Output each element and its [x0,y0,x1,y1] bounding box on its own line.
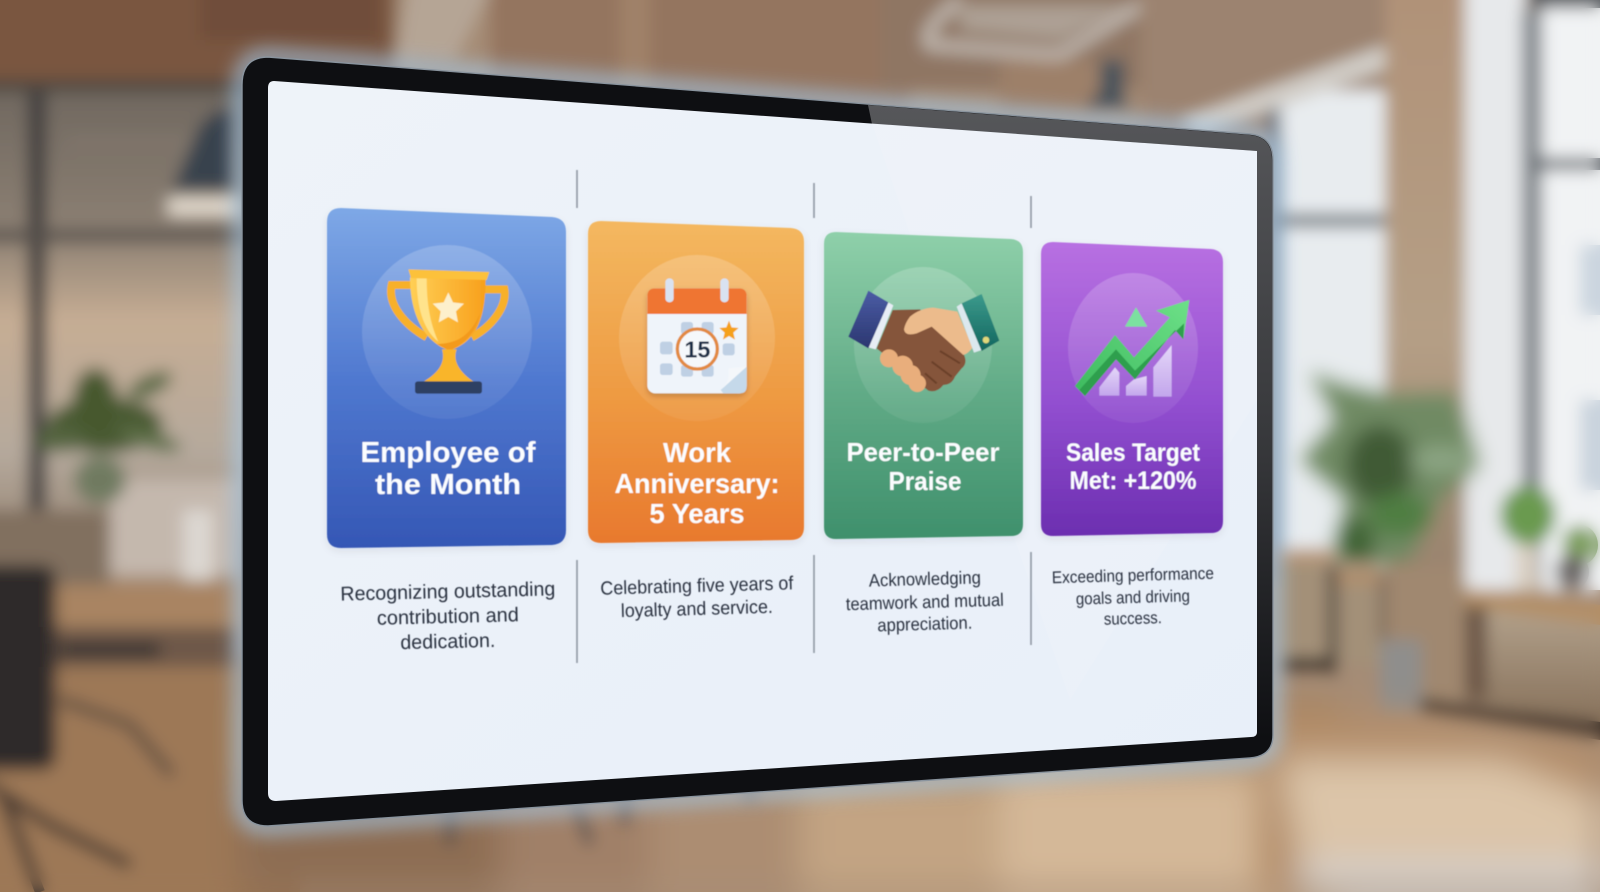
icon: trophy [391,269,505,394]
column dividers [577,170,1031,663]
card title [360,437,536,501]
card description: success. [1104,608,1162,629]
card title: Anniversary: [614,468,780,499]
card title: 5 Years [650,498,744,529]
card title: Praise [888,466,962,496]
card description: dedication. [400,630,496,654]
card description: teamwork and mutual [846,590,1004,614]
icon: calendar: 15 [684,336,710,362]
bezel [242,57,1273,826]
card description: contribution and [377,604,519,630]
card description [600,573,794,622]
card description: loyalty and service. [621,597,773,622]
icon: handshake [848,291,999,392]
card title: Met: +120% [1070,467,1196,495]
card title: Sales Target [1066,439,1201,467]
card description: Exceeding performance [1052,564,1214,587]
icon: calendar [647,278,747,393]
card description: Recognizing outstanding [340,578,556,606]
card description [846,567,1004,635]
card: Work Anniversary [588,221,804,543]
card: Peer-to-Peer Praise [824,232,1023,539]
card description: Acknowledging [869,567,981,591]
screen [268,81,1257,801]
screen reflection [872,124,1257,700]
card: Sales Target Met [1041,242,1223,536]
card title: Employee of [360,437,536,469]
icon: growth chart [1075,300,1189,397]
display monitor [242,57,1273,826]
card: Employee of the Month [327,208,566,548]
card description [1052,564,1214,629]
screen glow [242,57,1273,826]
bezel grey reflection [868,105,1272,738]
card title [614,437,780,529]
card title [846,437,1000,496]
card description: appreciation. [877,613,973,635]
card description [340,578,556,654]
card title: Work [663,437,731,468]
card title: Peer-to-Peer [846,437,1000,467]
card description: goals and driving [1076,586,1190,609]
card title: the Month [375,469,521,501]
card description: Celebrating five years of [600,573,794,600]
card title [1066,439,1201,495]
